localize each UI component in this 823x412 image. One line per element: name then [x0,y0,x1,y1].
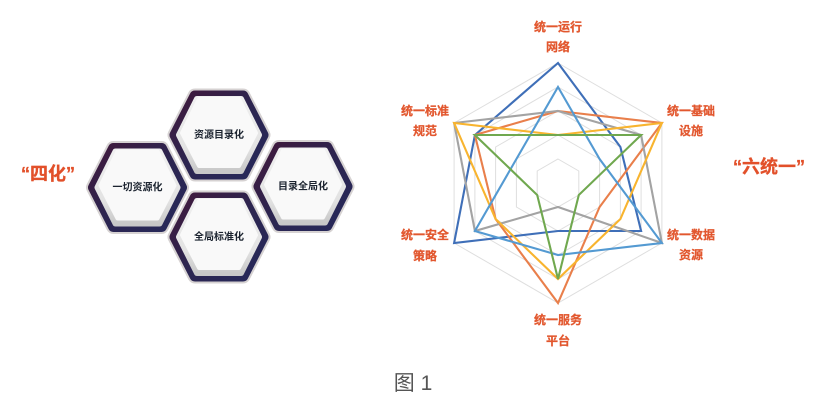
axis label: 统一服务平台: 统一服务 [534,312,582,327]
radar chart [454,63,662,303]
hexagon group: 四化 [94,96,347,276]
axis label: 统一数据资源: 资源 [679,247,703,262]
axis label: 统一数据资源: 统一数据 [667,227,715,242]
hexagon: 一切资源化 [94,148,182,226]
series: yellow [454,123,662,279]
series: gray [454,111,662,243]
hexagon: 目录全局化 [259,148,347,226]
series: green [475,135,641,279]
axis label: 统一标准规范 [401,103,449,138]
hexagon: 一切资源化: 一切资源化 [112,180,162,194]
hexagon: 资源目录化 [175,96,263,174]
heading: 六统一: “六统一” [733,156,805,177]
hexagon: 目录全局化: 目录全局化 [278,180,328,192]
axis label: 统一基础设施 [667,103,715,138]
axis label: 统一安全策略: 统一安全 [401,227,449,242]
hexagon: 全局标准化: 全局标准化 [194,230,244,243]
series: orange [475,111,662,303]
axis label: 统一安全策略: 策略 [413,248,437,263]
axis label: 统一数据资源 [667,227,715,262]
hexagon: 资源目录化: 资源目录化 [194,128,244,141]
axis label: 统一运行网络: 统一运行 [534,19,582,34]
axis label: 统一服务平台: 平台 [546,333,570,348]
series: light blue [475,87,662,255]
axis label: 统一标准规范: 统一标准 [401,103,449,118]
axis label: 统一安全策略 [401,227,449,263]
axis label: 统一运行网络: 网络 [546,39,570,54]
axis label: 统一服务平台 [534,312,582,348]
axis label: 统一基础设施: 统一基础 [667,103,715,118]
axis label: 统一标准规范: 规范 [413,123,437,138]
axis label: 统一运行网络 [534,19,582,54]
figure caption: 图 1 [394,372,432,395]
heading: 四化: “四化” [21,163,75,184]
axis label: 统一基础设施: 设施 [679,123,703,138]
hexagon: 全局标准化 [175,198,263,276]
series: dark blue [454,63,641,243]
